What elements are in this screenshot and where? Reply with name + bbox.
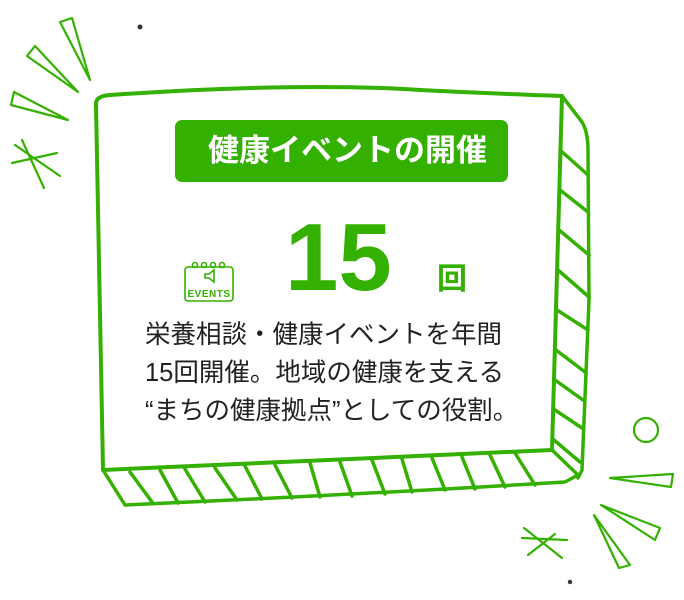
unit 回: 回	[437, 263, 467, 296]
bursts top-left	[11, 18, 90, 188]
description text: 15回開催。地域の健康を支える	[145, 359, 504, 387]
right side hatched face	[554, 96, 589, 478]
bursts bottom-right	[522, 418, 673, 568]
description text: 栄養相談・健康イベントを年間	[145, 321, 502, 349]
icon: events calendar: EVENTS	[187, 289, 231, 300]
big number 15: 15	[285, 204, 392, 311]
description text	[145, 321, 518, 425]
bottom hatched face	[103, 450, 578, 505]
dots	[138, 24, 142, 30]
title badge	[175, 120, 508, 182]
description text: “まちの健康拠点”としての役割。	[145, 397, 518, 425]
title badge: 健康イベントの開催	[208, 133, 487, 168]
front face outline	[96, 87, 562, 470]
icon: events calendar	[184, 262, 234, 302]
